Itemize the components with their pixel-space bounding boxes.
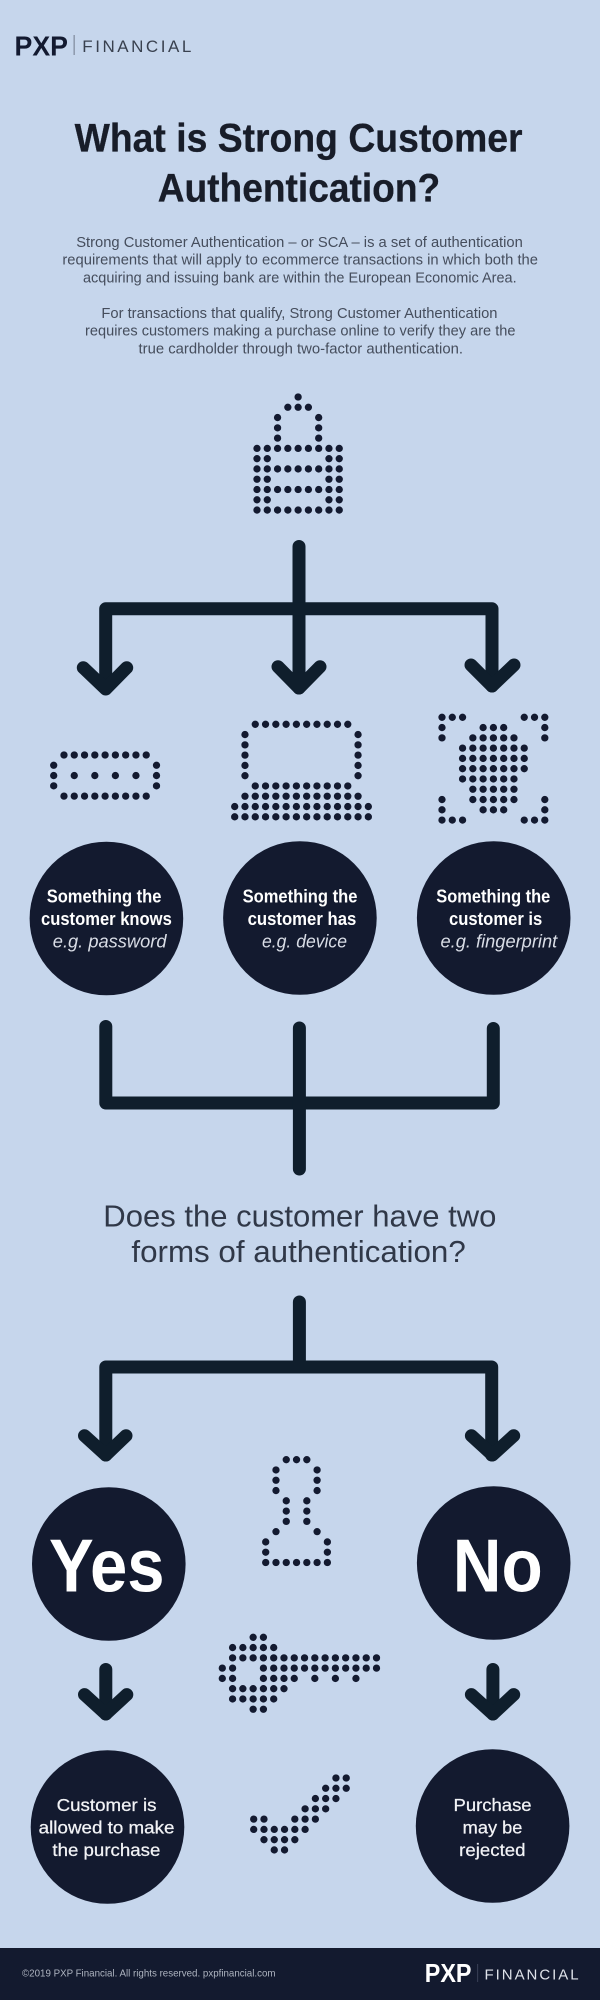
question heading: forms of authentication? [131, 1235, 466, 1269]
circle: purchase may be rejected: rejected [459, 1840, 526, 1860]
copyright text: ©2019 PXP Financial. All rights reserved. pxpfinancial.com [22, 1968, 276, 1980]
header logo [14, 30, 191, 62]
title [75, 117, 523, 211]
header logo: PXP [14, 30, 68, 62]
intro paragraph 2: true cardholder through two-factor authentication. [138, 340, 463, 357]
icon: padlock [257, 397, 339, 510]
icon: password field [54, 755, 157, 796]
circle: customer is allowed to make the purchase: Customer is [57, 1795, 157, 1815]
icon: laptop [235, 724, 368, 817]
arrow: three-way split to authentication factors [83, 546, 514, 689]
circle: no: No [453, 1523, 543, 1607]
circle: something the customer knows: e.g. password [53, 930, 167, 951]
circle: something the customer is [417, 841, 570, 995]
title: Authentication? [158, 167, 440, 211]
circle: something the customer knows: Something the [47, 886, 162, 907]
circle: something the customer is: e.g. fingerprint [440, 930, 558, 951]
footer logo: PXP [425, 1958, 472, 1988]
circle: no [417, 1486, 570, 1640]
circle: something the customer knows [30, 842, 183, 995]
circle: customer is allowed to make the purchase: the purchase [52, 1840, 160, 1860]
arrow: no outcome [471, 1670, 514, 1714]
intro paragraph 1: acquiring and issuing bank are within the European Economic Area. [83, 269, 517, 286]
circle: something the customer has: customer has [248, 908, 356, 929]
circle: purchase may be rejected [416, 1749, 569, 1903]
footer logo: FINANCIAL [484, 1966, 579, 1983]
header logo: FINANCIAL [82, 37, 191, 56]
circle: customer is allowed to make the purchase [31, 1750, 184, 1904]
question heading [103, 1200, 496, 1269]
intro paragraph 2: requires customers making a purchase online to verify they are the [85, 323, 516, 340]
arrow: yes or no split [84, 1302, 514, 1455]
circle: something the customer has: Something the [243, 886, 357, 907]
icon: check mark [254, 1778, 346, 1850]
circle: yes: Yes [49, 1523, 165, 1607]
footer bar [0, 1948, 600, 2000]
circle: yes [32, 1487, 186, 1641]
circle: purchase may be rejected: may be [463, 1818, 522, 1838]
intro paragraph 1 [62, 234, 538, 286]
intro paragraph 1: Strong Customer Authentication – or SCA – is a set of authentication [76, 234, 523, 251]
intro paragraph 2: For transactions that qualify, Strong Customer Authentication [101, 305, 498, 322]
circle: something the customer is: customer is [449, 908, 542, 929]
footer logo [425, 1958, 579, 1988]
intro paragraph 1: requirements that will apply to ecommerce transactions in which both the [62, 252, 538, 269]
circle: something the customer has [223, 841, 377, 995]
question heading: Does the customer have two [103, 1200, 496, 1234]
circle: something the customer knows: customer knows [41, 908, 172, 929]
intro paragraph 2 [85, 305, 516, 357]
circle: something the customer is: Something the [436, 886, 550, 907]
icon: person [266, 1460, 327, 1562]
title: What is Strong Customer [75, 117, 523, 161]
circle: purchase may be rejected: Purchase [454, 1795, 532, 1815]
arrow: yes outcome [84, 1670, 127, 1714]
arrow: factors merge connector [106, 1026, 493, 1169]
icon: fingerprint scan [442, 717, 545, 820]
circle: something the customer has: e.g. device [262, 930, 347, 951]
circle: customer is allowed to make the purchase: allowed to make [39, 1818, 175, 1838]
icon: key [222, 1637, 376, 1709]
